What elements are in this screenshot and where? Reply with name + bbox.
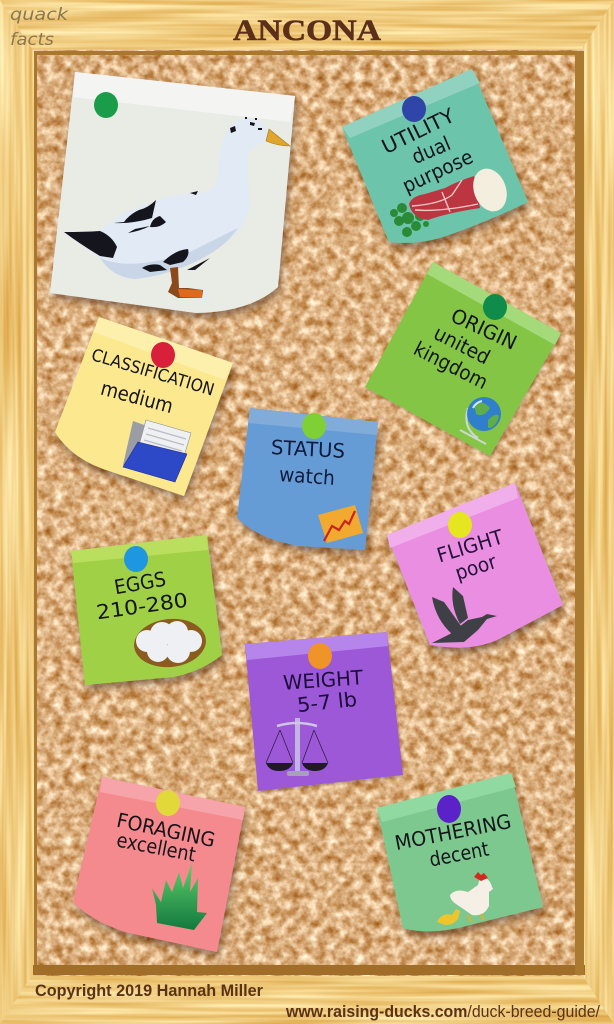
- value: poor: [452, 549, 500, 585]
- note: mothering: [377, 773, 543, 931]
- pin: [483, 294, 507, 320]
- icon: meat, egg and parsley: [390, 164, 513, 237]
- label: quack facts: facts: [10, 30, 54, 50]
- note: utility: purpose: [399, 144, 477, 198]
- note: utility: [342, 69, 528, 243]
- icon: balance scales: [266, 718, 328, 776]
- note: foraging: [73, 777, 245, 952]
- icon: hen and chick: [437, 872, 493, 925]
- note: origin: kingdom: [410, 336, 492, 394]
- note: origin: [365, 262, 561, 456]
- label: quack facts: quack: [10, 5, 69, 25]
- note: duck photo: [50, 72, 295, 313]
- value: 210-280: [95, 588, 189, 624]
- icon: nest of eggs: [132, 615, 208, 671]
- pin: [94, 92, 118, 118]
- pin: [437, 795, 461, 823]
- pin: [302, 413, 326, 439]
- label: quack facts: [10, 5, 69, 50]
- value: medium: [98, 376, 176, 418]
- heading: FORAGING: [115, 808, 217, 852]
- note paper: [377, 773, 543, 931]
- icon: grass: [152, 863, 207, 930]
- note paper: [73, 777, 245, 952]
- value: decent: [427, 836, 491, 872]
- icon: flying duck silhouette: [432, 587, 497, 643]
- note paper: [342, 69, 528, 243]
- heading: STATUS: [270, 435, 346, 463]
- pin: [448, 512, 472, 538]
- heading: MOTHERING: [393, 809, 513, 855]
- note paper: [50, 72, 295, 313]
- note: flight: [387, 483, 563, 648]
- icon: folder: [123, 420, 191, 482]
- pin: [402, 96, 426, 122]
- note paper: [245, 632, 403, 791]
- heading: EGGS: [112, 567, 168, 599]
- pin: [156, 790, 180, 816]
- heading: CLASSIFICATION: [89, 345, 216, 401]
- note: classification: [55, 317, 233, 496]
- note paper: [387, 483, 563, 648]
- note: weight: [245, 632, 403, 791]
- heading: FLIGHT: [434, 524, 507, 567]
- website url: www.raising-ducks.com/duck-breed-guide/: [285, 1002, 600, 1021]
- value: watch: [278, 462, 336, 490]
- heading: UTILITY: [378, 103, 459, 159]
- title: ANCONA: [233, 14, 381, 47]
- heading: ORIGIN: [447, 303, 521, 355]
- copyright: Copyright 2019 Hannah Miller: [35, 981, 263, 1000]
- note paper: [237, 408, 378, 550]
- icon: chart: [318, 505, 363, 543]
- note paper: [365, 262, 561, 456]
- note: eggs: [71, 535, 222, 685]
- illustration: Ancona duck: [64, 117, 290, 298]
- note paper: [71, 535, 222, 685]
- note: status: [237, 408, 378, 550]
- pin: [124, 546, 148, 572]
- note paper: [55, 317, 233, 496]
- icon: globe: [460, 397, 501, 444]
- heading: WEIGHT: [282, 665, 364, 695]
- pin: [151, 342, 175, 368]
- value: dual: [408, 131, 454, 169]
- value: united: [430, 321, 494, 369]
- value: 5-7 lb: [296, 687, 358, 717]
- pin: [308, 643, 332, 669]
- value: excellent: [115, 828, 198, 866]
